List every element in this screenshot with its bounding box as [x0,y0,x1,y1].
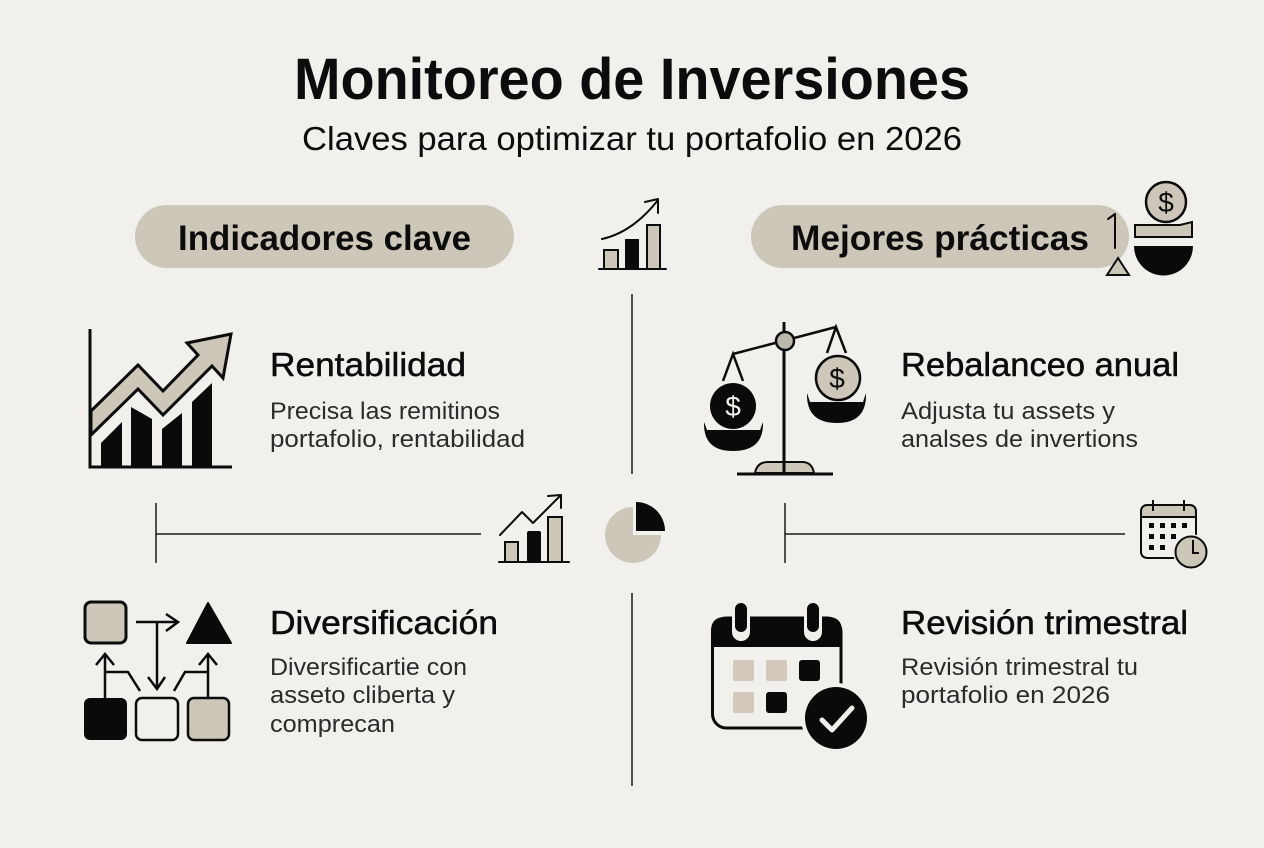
text block: Rebalanceo anual [901,398,1138,453]
heading pill: Mejores prácticas: Mejores prácticas [791,219,1089,258]
icon: connected asset blocks [84,602,231,740]
icon: balance scale with coins: $ [725,391,741,422]
heading: Revisión trimestral: Revisión trimestral [901,604,1188,641]
text block: Rentabilidad: Precisa las remitinos [270,398,500,425]
text block: Revisión trimestral [901,654,1138,709]
heading pill: Indicadores clave [135,205,514,268]
heading pill: Mejores prácticas [751,205,1129,268]
text block: Revisión trimestral: Revisión trimestral tu [901,654,1138,681]
heading: Diversificación: Diversificación [270,604,498,641]
text block: Diversificación: comprecan [270,711,395,738]
text block: Rentabilidad: portafolio, rentabilidad [270,426,525,453]
heading: Rebalanceo anual: Rebalanceo anual [901,346,1179,383]
icon: calendar with check badge [711,603,871,753]
icon: bar chart with rising arrow [90,329,232,467]
icon: pie chart [605,502,665,563]
heading pill: Indicadores clave: Indicadores clave [178,219,471,258]
text block: Rebalanceo anual: analses de invertions [901,426,1138,453]
text block: Rebalanceo anual: Adjusta tu assets y [901,398,1115,425]
text block: Diversificación [270,654,467,738]
panel: Rentabilidad [90,329,525,467]
text block: Diversificación: Diversificartie con [270,654,467,681]
icon: balance scale with coins [704,322,866,474]
heading: Rentabilidad: Rentabilidad [270,346,466,383]
panel: Rebalanceo anual [704,322,1179,474]
text block: Revisión trimestral: portafolio en 2026 [901,682,1110,709]
icon: coin over bowl [1107,182,1193,276]
icon: small bar chart with arrow [499,495,569,562]
icon: calendar with clock [1141,500,1209,570]
subtitle: Claves para optimizar tu portafolio en 2026 [302,120,962,157]
divider lines [156,294,1125,786]
icon: balance scale with coins: $ [829,363,845,394]
icon: coin over bowl: $ [1158,187,1174,218]
panel: Diversificación [84,602,498,740]
panel: Revisión trimestral [711,603,1188,753]
title: Monitoreo de Inversiones [294,47,970,112]
text block: Diversificación: asseto cliberta y [270,682,455,709]
text block: Rentabilidad [270,398,525,453]
icon: header bar chart with rising curve [599,199,666,269]
